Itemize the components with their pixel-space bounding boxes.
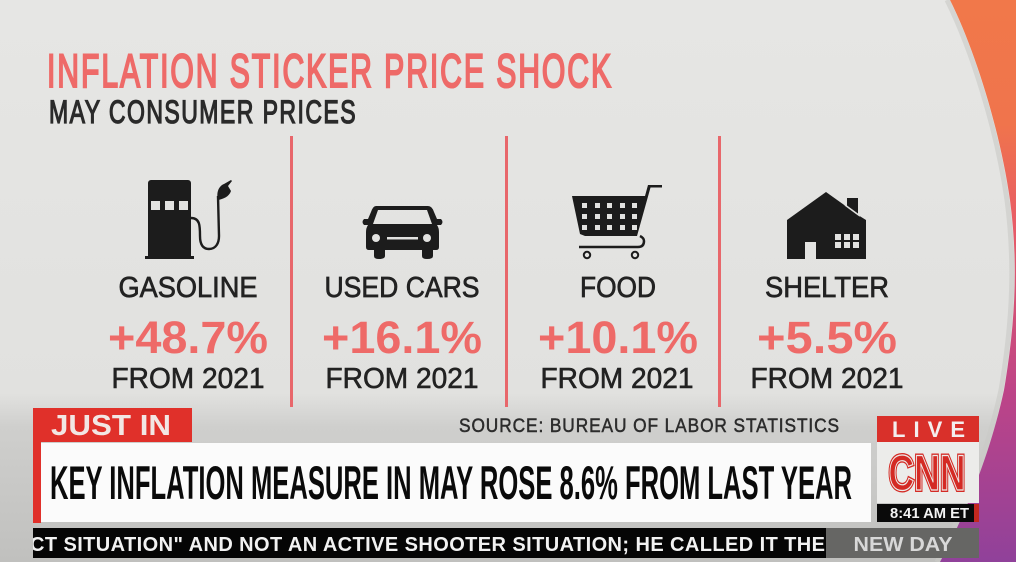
dividers (290, 136, 721, 407)
live bug: 8:41 AM ET (890, 506, 969, 522)
cnn logo: CNN (888, 445, 966, 501)
just in tag (33, 408, 192, 523)
note: FROM 2021 (540, 363, 694, 395)
news ticker: CT SITUATION" AND NOT AN ACTIVE SHOOTER SITUATION; HE CALLED IT THE (30, 534, 825, 556)
column: shelter (750, 192, 904, 395)
column: gasoline (108, 180, 268, 395)
headline banner (41, 443, 871, 522)
icon: shopping cart (572, 185, 662, 258)
icon: house (787, 192, 866, 259)
news ticker (30, 528, 979, 558)
live bug: LIVE (892, 417, 965, 442)
value: +16.1% (322, 312, 482, 363)
note: FROM 2021 (750, 363, 904, 395)
news ticker: NEW DAY (854, 534, 953, 556)
column: used cars (322, 206, 482, 395)
value: +48.7% (108, 312, 268, 363)
icon: gas pump (145, 180, 232, 259)
icon: car (362, 206, 442, 259)
label: SHELTER (765, 272, 889, 304)
value: +5.5% (757, 312, 897, 363)
column: food (538, 185, 698, 395)
live bug (877, 416, 979, 522)
just in tag: JUST IN (51, 410, 171, 442)
label: FOOD (580, 272, 656, 304)
cnn logo: CNN (888, 445, 966, 501)
note: FROM 2021 (112, 363, 264, 395)
label: GASOLINE (118, 272, 258, 304)
label: USED CARS (324, 272, 480, 304)
value: +10.1% (538, 312, 698, 363)
source: SOURCE: BUREAU OF LABOR STATISTICS (459, 416, 840, 437)
note: FROM 2021 (326, 363, 478, 395)
subtitle: MAY CONSUMER PRICES (49, 94, 357, 130)
title: INFLATION STICKER PRICE SHOCK (47, 44, 613, 97)
